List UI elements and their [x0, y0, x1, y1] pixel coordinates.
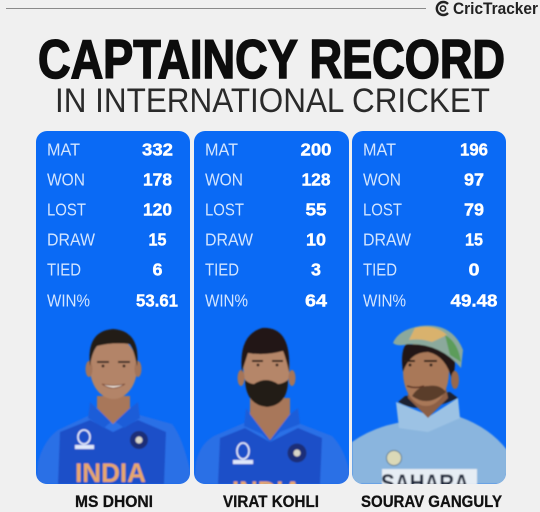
portrait: Virat Kohli: INDIA — [232, 476, 302, 506]
stats: MS Dhoni: 15 — [148, 230, 167, 250]
name: Sourav Ganguly: SOURAV GANGULY — [361, 492, 503, 511]
stats: Sourav Ganguly: 49.48 — [450, 290, 498, 310]
stats: Virat Kohli: DRAW — [205, 230, 253, 250]
stats: Sourav Ganguly: DRAW — [363, 230, 411, 250]
panel: MS Dhoni — [36, 131, 190, 488]
stats: Virat Kohli — [205, 140, 332, 310]
subtitle: IN INTERNATIONAL CRICKET — [55, 82, 490, 120]
stats: Sourav Ganguly: MAT — [363, 140, 396, 160]
stats: Virat Kohli: 10 — [306, 230, 326, 250]
stats: MS Dhoni — [47, 140, 178, 310]
stats: Sourav Ganguly: 79 — [464, 200, 484, 220]
stats: MS Dhoni: MAT — [47, 140, 80, 160]
stats: Sourav Ganguly: WON — [363, 170, 401, 190]
stats: MS Dhoni: 120 — [143, 200, 172, 220]
stats: Virat Kohli: WIN% — [205, 290, 248, 310]
stats: MS Dhoni: DRAW — [47, 230, 95, 250]
stats: Virat Kohli: WON — [205, 170, 243, 190]
stats: MS Dhoni: WIN% — [47, 290, 90, 310]
stats: Virat Kohli: 64 — [305, 290, 327, 310]
stats: Virat Kohli: LOST — [205, 200, 244, 220]
stats: Sourav Ganguly: 97 — [464, 170, 484, 190]
stats: Virat Kohli: MAT — [205, 140, 238, 160]
name: Virat Kohli: VIRAT KOHLI — [223, 492, 319, 511]
stats: Virat Kohli: TIED — [205, 260, 239, 280]
stats: Sourav Ganguly: 196 — [460, 140, 488, 160]
stats: MS Dhoni: WON — [47, 170, 85, 190]
stats: Virat Kohli: 200 — [300, 140, 332, 160]
stats: MS Dhoni: 53.61 — [136, 290, 178, 310]
stats: MS Dhoni: 6 — [152, 260, 163, 280]
stats: Virat Kohli: 3 — [311, 260, 321, 280]
stats: Virat Kohli: 128 — [302, 170, 331, 190]
stats: Sourav Ganguly: 0 — [468, 260, 480, 280]
stats: Sourav Ganguly: TIED — [363, 260, 397, 280]
portrait: MS Dhoni — [36, 329, 190, 488]
portrait: MS Dhoni: INDIA — [75, 458, 146, 488]
portrait: Sourav Ganguly — [352, 326, 507, 497]
stats: Virat Kohli: 55 — [306, 200, 327, 220]
portrait: Sourav Ganguly: SAHARA — [381, 470, 469, 497]
panel: Sourav Ganguly — [352, 131, 507, 497]
stats: Sourav Ganguly: WIN% — [363, 290, 406, 310]
stats: Sourav Ganguly: LOST — [363, 200, 402, 220]
stats: MS Dhoni: LOST — [47, 200, 86, 220]
stats: MS Dhoni: 178 — [143, 170, 172, 190]
stats: Sourav Ganguly — [363, 140, 498, 310]
portrait: Virat Kohli — [194, 326, 349, 484]
stats: Sourav Ganguly: 15 — [465, 230, 483, 250]
panel: Virat Kohli — [194, 131, 349, 506]
stats: MS Dhoni: 332 — [142, 140, 173, 160]
stats: MS Dhoni: TIED — [47, 260, 81, 280]
name: MS Dhoni: MS DHONI — [75, 492, 153, 511]
